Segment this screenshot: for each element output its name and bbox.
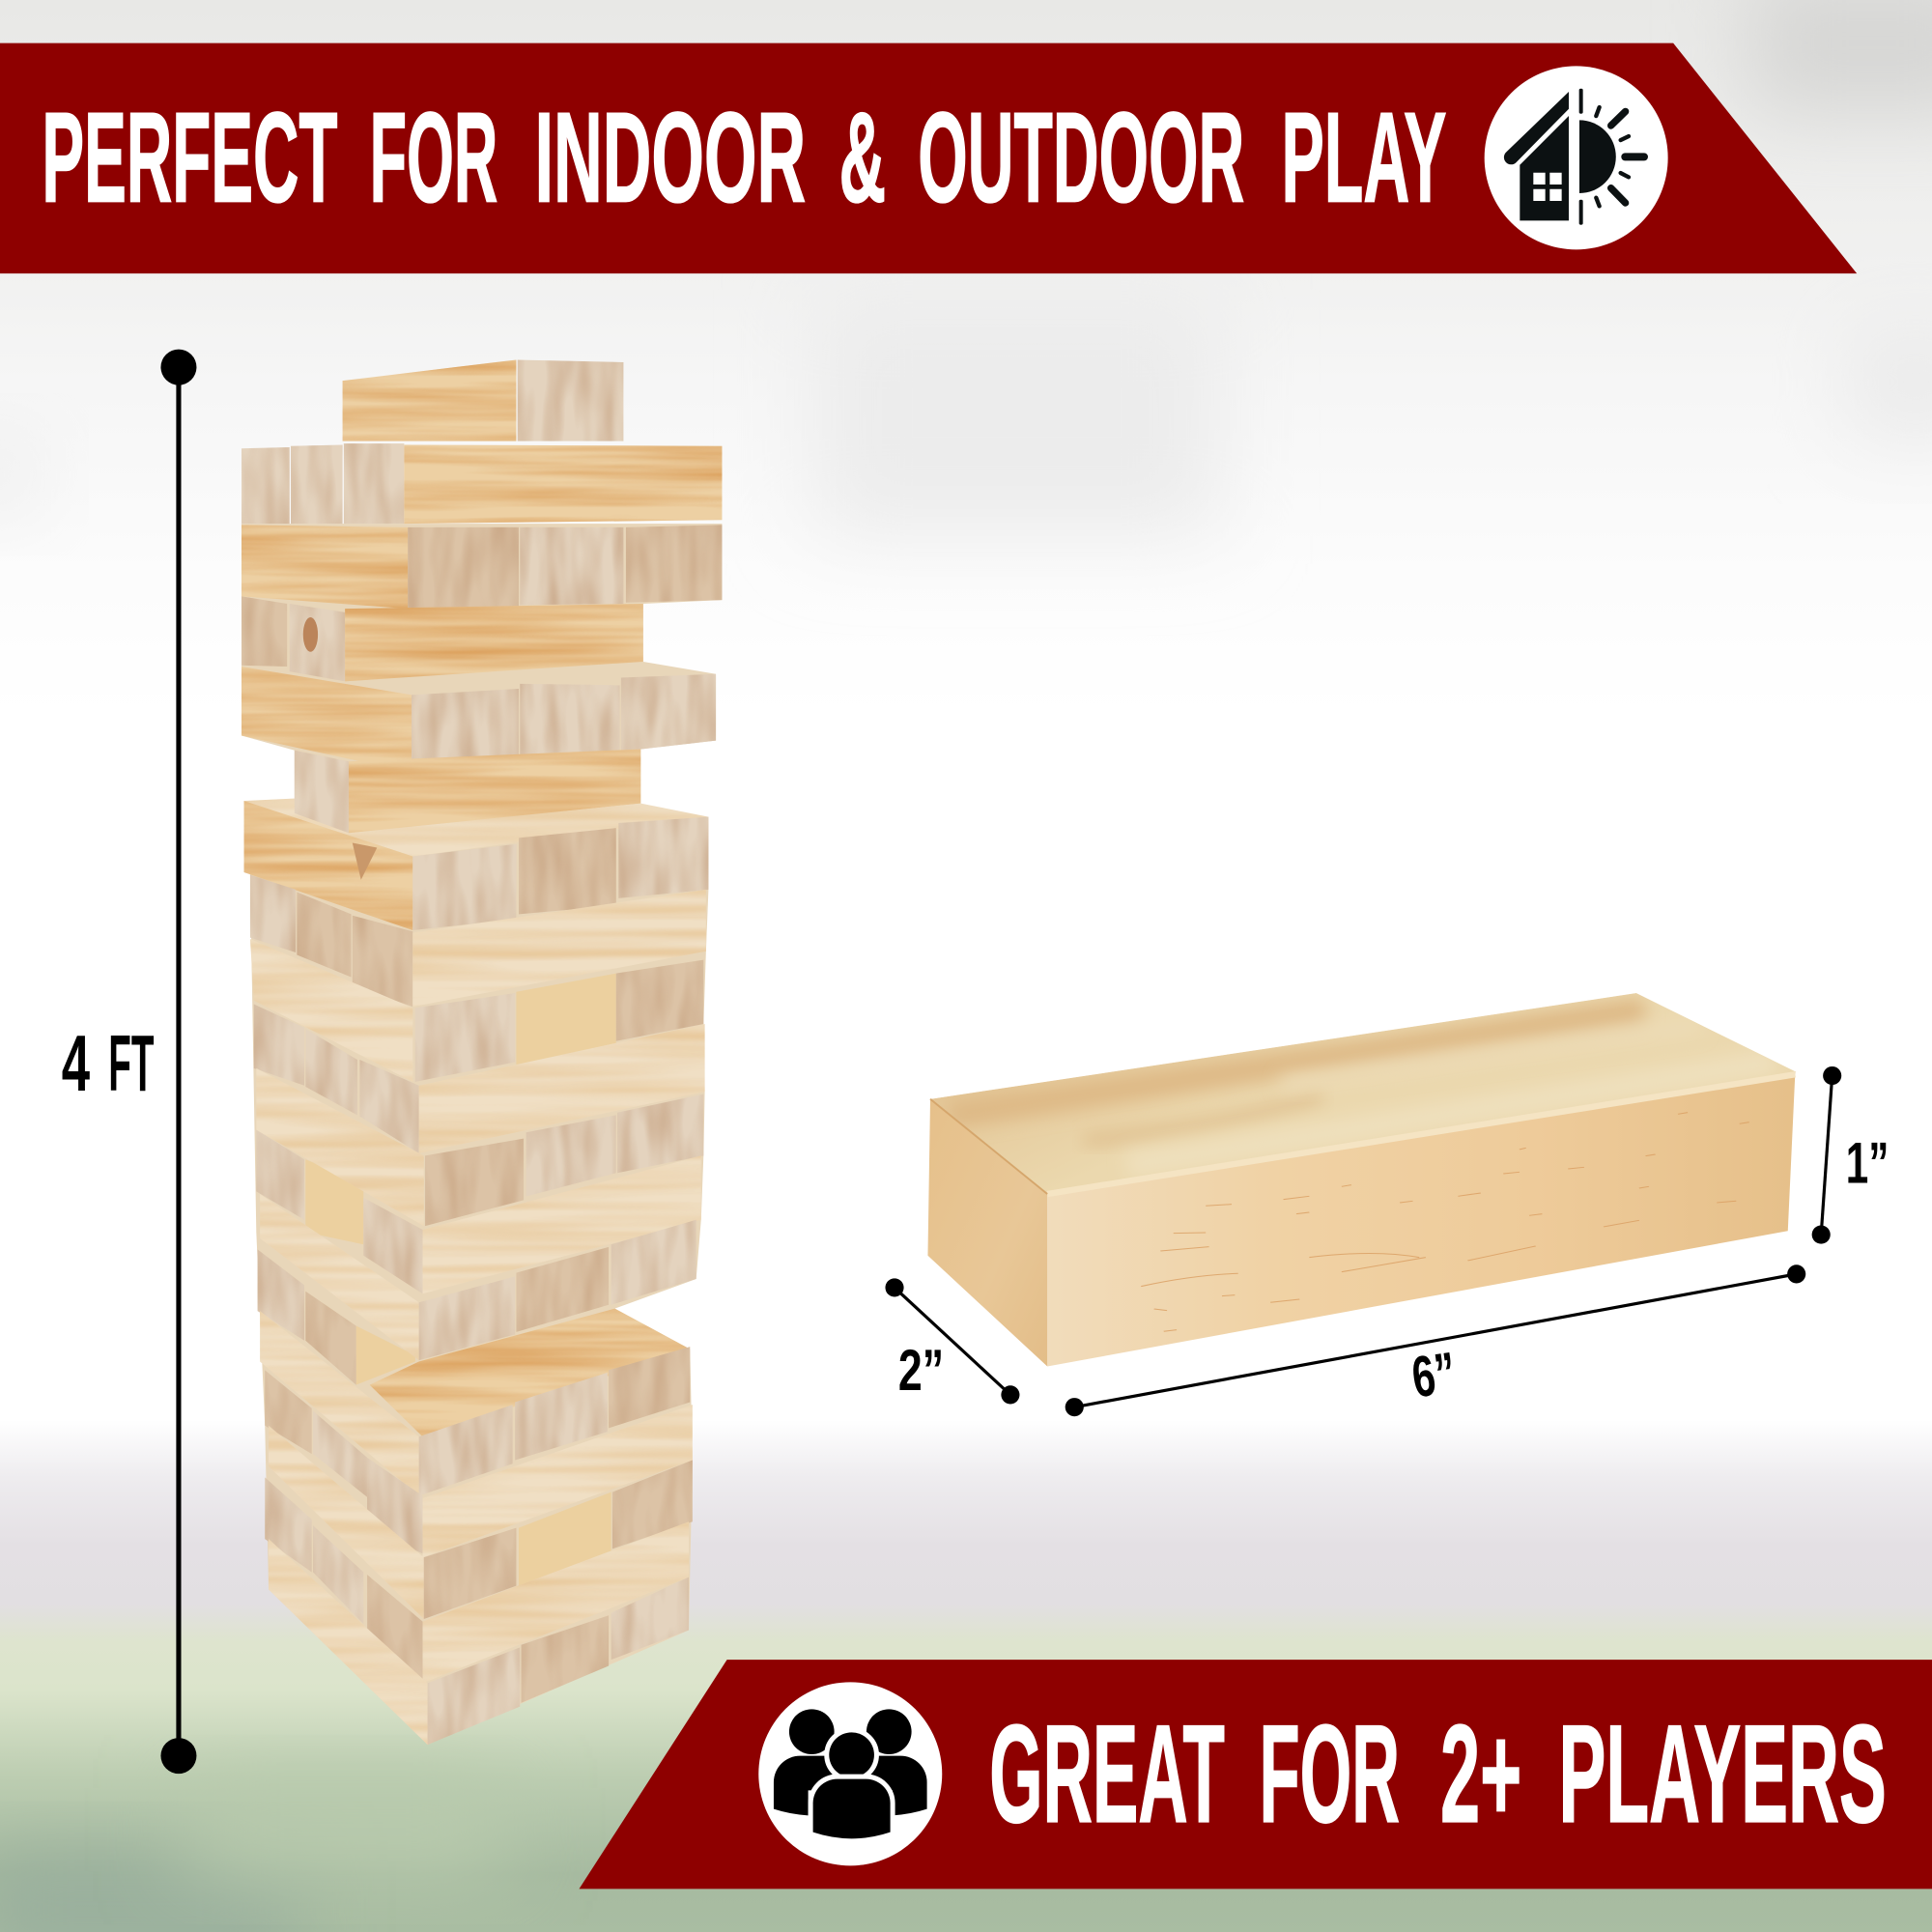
depth dimension 2 inch [885, 1278, 1019, 1404]
top banner heading: INDOOR [535, 87, 806, 230]
block layer 2 [242, 443, 722, 524]
block layer 3 [242, 525, 722, 609]
depth dimension 2 inch: 2” [898, 1338, 944, 1403]
block layer 11 [256, 1068, 703, 1226]
block layer 18 [265, 1477, 689, 1683]
top banner heading: PLAY [1282, 87, 1446, 230]
block layer 19 [269, 1539, 689, 1745]
bottom banner heading: FOR [1260, 1696, 1400, 1852]
block layer 10 [254, 1005, 705, 1153]
height label [62, 1018, 154, 1108]
block layer 4 [242, 596, 643, 681]
top banner [0, 43, 1857, 273]
block layer 13 [260, 1194, 696, 1360]
bottom banner heading: GREAT [989, 1696, 1225, 1852]
icon: house and sun [1485, 66, 1668, 249]
block layer 17 [269, 1426, 693, 1619]
block layer 9 [250, 939, 703, 1082]
icon: group of players [758, 1682, 942, 1865]
block layer 16 [265, 1370, 693, 1557]
length dimension 6 inch: 6” [1407, 1340, 1460, 1410]
block layer 15 [260, 1311, 690, 1495]
top banner heading [42, 87, 1446, 230]
bottom banner [579, 1660, 1932, 1889]
block layer 7 [244, 801, 708, 930]
top banner heading: FOR [370, 87, 497, 230]
block end face [927, 1099, 1047, 1367]
block top face [930, 993, 1797, 1194]
height dimension 1 inch: 1” [1846, 1130, 1889, 1195]
single wooden block [927, 993, 1797, 1367]
wooden tower [242, 359, 722, 1745]
block corner knick [930, 1099, 1047, 1194]
height label: 4 [62, 1018, 90, 1108]
block layer 14 [258, 1249, 356, 1385]
block front face grain pores [1141, 1113, 1749, 1331]
top banner heading: PERFECT [42, 87, 337, 230]
bottom banner heading: 2+ [1440, 1696, 1521, 1852]
length dimension 6 inch [1065, 1264, 1805, 1416]
block layer 1 [343, 359, 623, 441]
top banner heading: OUTDOOR [918, 87, 1244, 230]
height dimension line [160, 350, 196, 1774]
block layer 12 [256, 1130, 701, 1293]
block layer 8 [250, 875, 706, 1007]
block layer 6 [295, 750, 640, 833]
block layer 5 [242, 667, 716, 773]
tower backing and hollow interiors [242, 524, 722, 1745]
block front face [1047, 1072, 1795, 1367]
bottom banner heading [989, 1696, 1887, 1852]
top banner heading: & [839, 87, 886, 230]
height dimension 1 inch [1812, 1066, 1889, 1244]
text: FT [108, 1018, 154, 1108]
block edge highlight [1047, 1074, 1795, 1194]
